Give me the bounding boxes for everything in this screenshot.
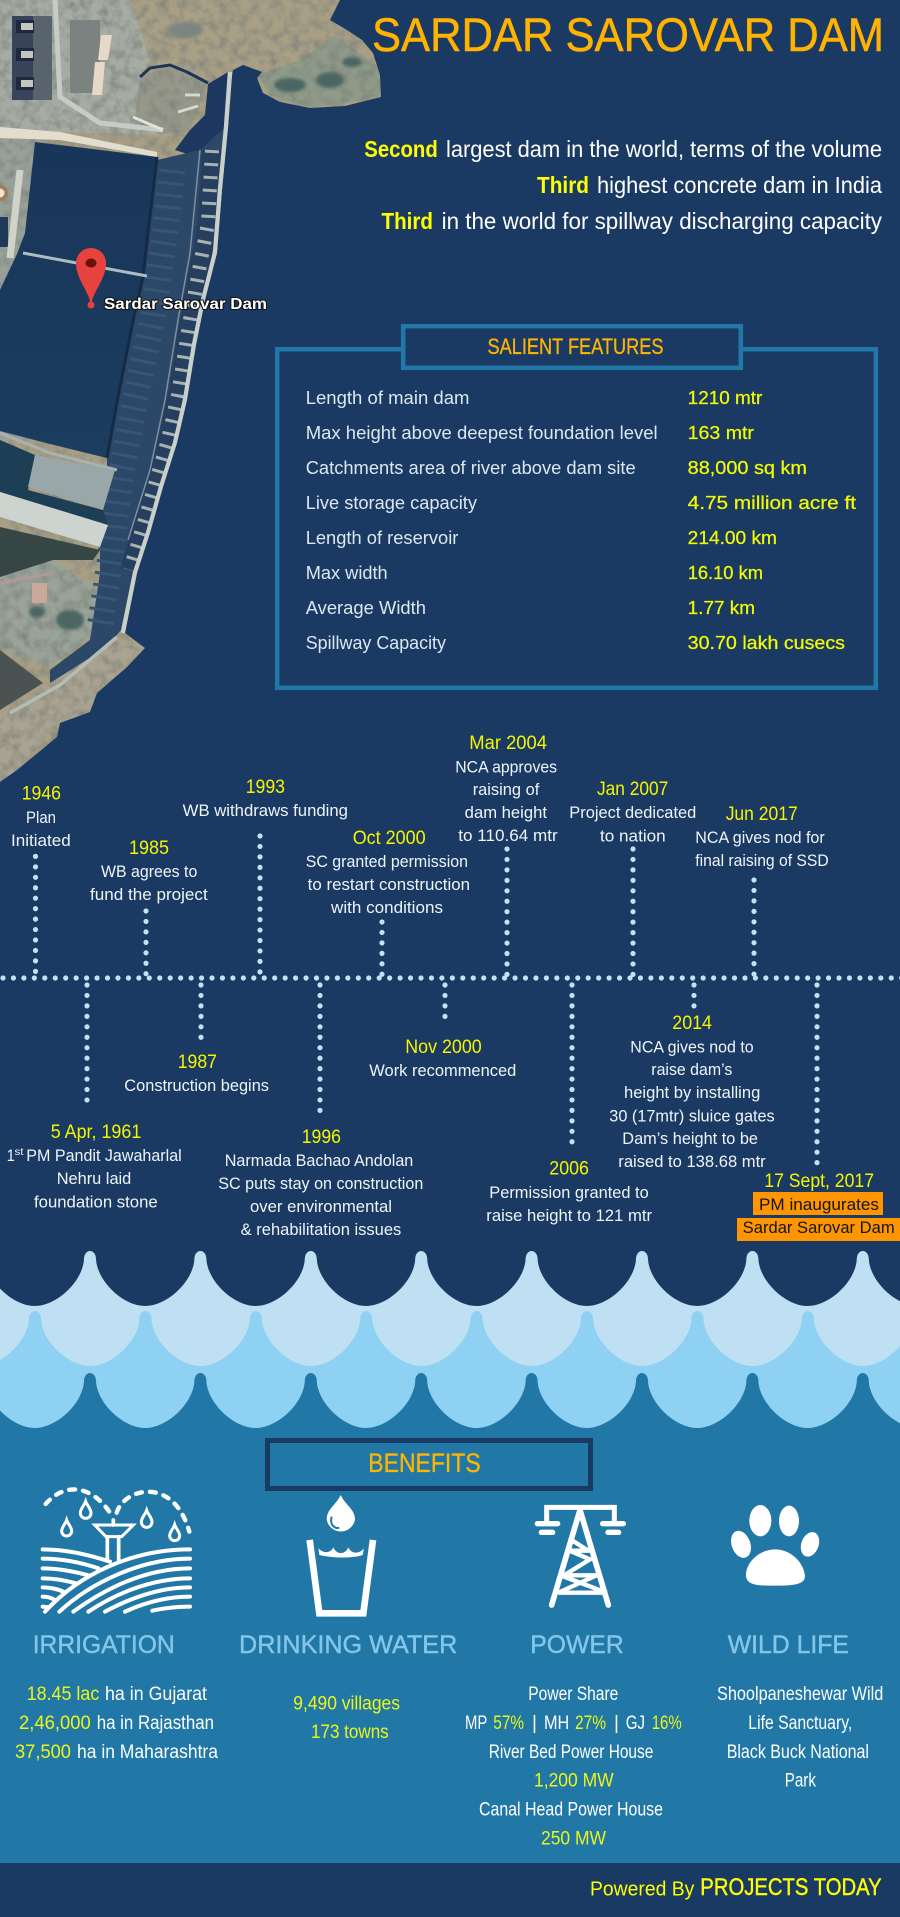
event: 1996: Narmada Bachao Andolan	[225, 1152, 413, 1170]
event: 2014: raised to 138.68 mtr	[618, 1153, 766, 1171]
event: 1946: Initiated	[11, 832, 71, 850]
event: 2014: height by installing	[624, 1084, 760, 1102]
event: 2014: NCA gives nod to	[630, 1038, 754, 1056]
event: 2006: Permission granted to	[489, 1184, 649, 1202]
feature labels: Spillway Capacity	[306, 632, 447, 653]
event: 1987: Construction begins	[124, 1077, 269, 1095]
benefits heading: BENEFITS	[368, 1448, 481, 1478]
event: 5 Apr 1961	[7, 985, 182, 1212]
event: 1993	[183, 777, 348, 972]
feature values: 163 mtr	[688, 422, 754, 443]
event: 1985: WB agrees to	[101, 863, 197, 881]
event: 17 Sept 2017: PM inaugurates	[759, 1196, 879, 1214]
benefit: power: 27%	[575, 1713, 606, 1734]
event: 1996: 1996	[302, 1127, 341, 1148]
benefit: power: 250 MW	[541, 1828, 606, 1849]
salient features heading: SALIENT FEATURES	[488, 334, 664, 359]
dark trees on the islet	[29, 22, 362, 630]
event: 17 Sept 2017: Sardar Sarovar Dam	[743, 1219, 895, 1237]
timeline	[3, 733, 900, 1241]
feature labels: Average Width	[306, 597, 426, 618]
event: 1996: SC puts stay on construction	[218, 1175, 423, 1193]
benefit: irrigation: ha in Maharashtra	[77, 1742, 218, 1763]
event: 1946: Plan	[26, 809, 56, 827]
benefits heading	[268, 1440, 590, 1488]
footer	[0, 1863, 900, 1917]
intro facts: Second	[364, 136, 438, 162]
event: 2014: raise dam’s	[651, 1061, 732, 1079]
benefit: power: MP	[465, 1713, 487, 1734]
feature values	[688, 387, 856, 653]
lower basin and roads	[0, 440, 108, 525]
event: 2014	[609, 985, 775, 1171]
benefit: power: River Bed Power House	[489, 1742, 653, 1763]
feature values: 16.10 km	[688, 562, 763, 583]
feature labels: Max width	[306, 562, 388, 583]
event: Mar 2004: Mar 2004	[469, 733, 547, 754]
benefit: irrigation: 18.45 lac	[27, 1684, 99, 1705]
benefit: wild life: WILD LIFE	[728, 1631, 849, 1659]
event: Oct 2000: with conditions	[330, 899, 443, 917]
event: Mar 2004: raising of	[473, 781, 540, 799]
feature values: 214.00 km	[688, 527, 777, 548]
benefit: wild life: Park	[785, 1771, 816, 1792]
event: 17 Sept 2017	[737, 985, 900, 1241]
benefit: drinking water: 9,490 villages	[293, 1693, 400, 1714]
benefit: wild life	[717, 1631, 883, 1792]
event: Jan 2007: to nation	[600, 827, 666, 845]
event: Oct 2000: Oct 2000	[353, 828, 426, 849]
event: 2014: Dam’s height to be	[622, 1130, 758, 1148]
waves	[0, 1251, 900, 1917]
benefit: wild life: Black Buck National	[727, 1742, 869, 1763]
event: 2014: 30 (17mtr) sluice gates	[609, 1107, 775, 1125]
feature labels: Live storage capacity	[306, 492, 478, 513]
icon: paw print	[727, 1505, 822, 1586]
event: 1993: WB withdraws funding	[183, 802, 348, 820]
benefit: irrigation: ha in Rajasthan	[97, 1713, 214, 1734]
icon: irrigation	[43, 1489, 190, 1612]
benefit: power	[465, 1631, 682, 1849]
event: 5 Apr 1961: foundation stone	[34, 1194, 158, 1212]
feature values: 4.75 million acre ft	[688, 492, 856, 513]
event: Mar 2004: dam height	[465, 804, 547, 822]
intro facts: highest concrete dam in India	[597, 172, 882, 198]
benefit: irrigation: 2,46,000	[19, 1713, 91, 1734]
benefit: drinking water	[239, 1631, 457, 1743]
event: Oct 2000	[306, 828, 470, 975]
event: 2006	[486, 985, 653, 1225]
intro facts: largest dam in the world, terms of the volume	[446, 136, 882, 162]
intro facts: Third	[537, 172, 589, 198]
benefit: power: |	[532, 1713, 537, 1734]
event: 5 Apr 1961: st	[14, 1147, 24, 1158]
benefit: power: 16%	[652, 1713, 682, 1734]
benefit: power: 1,200 MW	[534, 1771, 614, 1792]
event: 1996: & rehabilitation issues	[241, 1221, 401, 1239]
feature labels	[306, 387, 658, 653]
benefit: power: MH	[544, 1713, 569, 1734]
feature values: 1.77 km	[688, 597, 755, 618]
event: 1946: 1946	[22, 784, 61, 805]
event: 1985: 1985	[129, 838, 169, 859]
event: Nov 2000: Nov 2000	[405, 1037, 482, 1058]
event: Nov 2000: Work recommenced	[369, 1062, 516, 1080]
footer: Powered By	[590, 1879, 694, 1901]
feature labels: Max height above deepest foundation level	[306, 422, 658, 443]
event: Oct 2000: SC granted permission	[306, 853, 468, 871]
benefit: power: 57%	[493, 1713, 524, 1734]
benefit: drinking water: 173 towns	[311, 1722, 389, 1743]
event: 5 Apr 1961: Nehru laid	[57, 1170, 131, 1188]
event: Jun 2017: final raising of SSD	[695, 852, 829, 870]
event: 1987	[124, 985, 269, 1095]
reservoir pool	[0, 142, 157, 458]
event: 1985: fund the project	[90, 886, 208, 904]
map pin with label	[76, 248, 267, 313]
event: 1987: 1987	[178, 1052, 217, 1073]
salient features heading	[403, 326, 741, 368]
event: Oct 2000: to restart construction	[308, 876, 470, 894]
event: 1996	[218, 985, 423, 1239]
feature labels: Catchments area of river above dam site	[306, 457, 636, 478]
event: 1996: over environmental	[250, 1198, 392, 1216]
panel: salient features	[277, 326, 876, 688]
event: 5 Apr 1961: 5 Apr, 1961	[51, 1122, 141, 1143]
event: Jun 2017: NCA gives nod for	[695, 829, 825, 847]
benefit: power: Power Share	[528, 1684, 618, 1705]
event: 2014: 2014	[672, 1013, 712, 1034]
feature labels: Length of main dam	[306, 387, 470, 408]
benefit: power: GJ	[626, 1713, 645, 1734]
benefit: power: Canal Head Power House	[479, 1800, 663, 1821]
benefit: power: POWER	[530, 1631, 624, 1659]
event: 1993: 1993	[246, 777, 285, 798]
event: Jun 2017	[695, 804, 829, 975]
event: Nov 2000	[369, 985, 516, 1080]
benefit: irrigation	[15, 1631, 218, 1763]
benefit: irrigation: IRRIGATION	[33, 1631, 175, 1659]
feature labels: Length of reservoir	[306, 527, 458, 548]
event: Mar 2004	[455, 733, 558, 975]
event: Mar 2004: NCA approves	[455, 758, 557, 776]
event: Mar 2004: to 110.64 mtr	[458, 827, 558, 845]
event: 5 Apr 1961: PM Pandit Jawaharlal	[26, 1147, 182, 1165]
event: 1985	[90, 838, 208, 975]
spillway	[50, 128, 224, 683]
aerial satellite view of dam	[0, 0, 400, 800]
event: Jun 2017: Jun 2017	[726, 804, 798, 825]
event: 5 Apr 1961: 1	[7, 1147, 15, 1165]
benefit: irrigation: 37,500	[15, 1742, 71, 1763]
map pin with label: Sardar Sarovar Dam	[104, 296, 267, 313]
intro facts: in the world for spillway discharging capacity	[442, 208, 882, 234]
event: Jan 2007	[569, 779, 696, 975]
intro facts: Third	[382, 208, 433, 234]
event: Jan 2007: Project dedicated	[569, 804, 696, 822]
benefit: power: |	[614, 1713, 619, 1734]
intro facts	[364, 136, 882, 234]
event: Jan 2007: Jan 2007	[597, 779, 668, 800]
event: 1946	[11, 784, 71, 972]
benefit: irrigation: ha in Gujarat	[105, 1684, 208, 1705]
icon: drinking water	[310, 1495, 373, 1613]
benefit: drinking water: DRINKING WATER	[239, 1631, 457, 1659]
feature values: 1210 mtr	[688, 387, 762, 408]
icon: power tower	[537, 1507, 623, 1605]
event: 2006: raise height to 121 mtr	[486, 1207, 653, 1225]
event: 17 Sept 2017: 17 Sept, 2017	[764, 1171, 874, 1192]
event: 2006: 2006	[549, 1159, 589, 1180]
channel above spillway	[175, 72, 228, 158]
feature values: 30.70 lakh cusecs	[688, 632, 845, 653]
feature values: 88,000 sq km	[688, 457, 807, 478]
benefit: wild life: Life Sanctuary,	[748, 1713, 852, 1734]
